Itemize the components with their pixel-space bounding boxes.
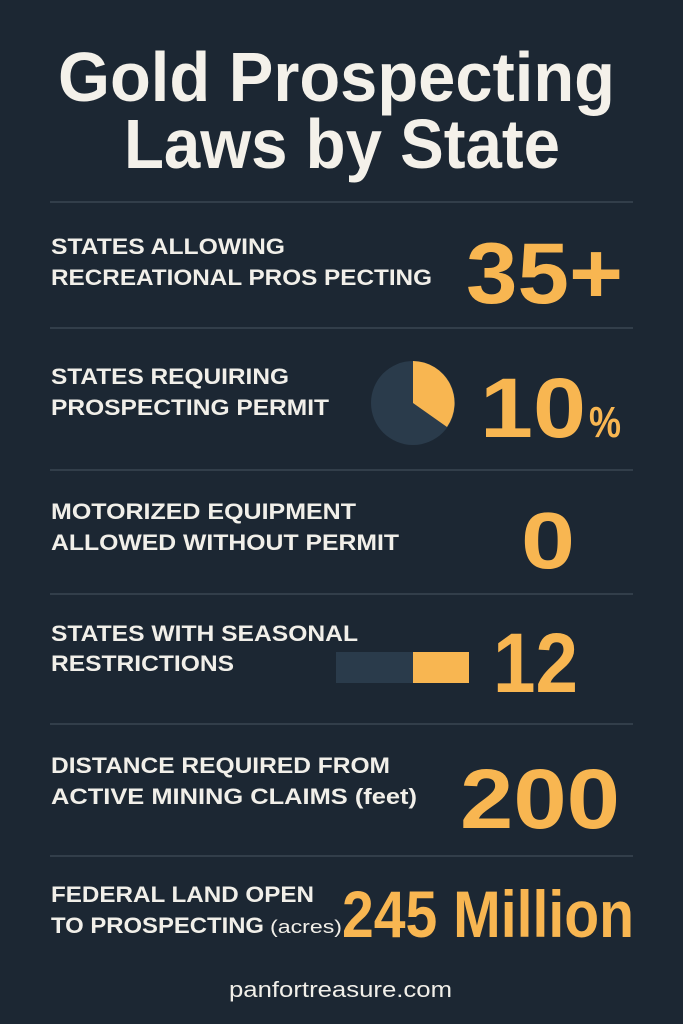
row 5: distance from claims: 200 — [460, 752, 620, 846]
footer: panfortreasure.com — [229, 977, 452, 1002]
title: Gold Prospecting — [58, 38, 615, 116]
row 4: seasonal restrictions: STATES WITH SEASONAL — [51, 621, 358, 646]
row 5: distance from claims: ACTIVE MINING CLAIMS (feet) — [51, 784, 417, 809]
row 2: prospecting permit — [51, 361, 621, 455]
title — [58, 38, 615, 183]
row 6: federal land: FEDERAL LAND OPEN — [51, 882, 314, 907]
row 1: recreational prospecting: RECREATIONAL PROS PECTING — [51, 265, 432, 290]
row 2: prospecting permit: STATES REQUIRING — [51, 364, 289, 389]
title: Laws by State — [124, 105, 560, 183]
row 3: motorized equipment — [51, 496, 575, 585]
row 5: distance from claims — [51, 752, 620, 846]
row 4: seasonal restrictions: RESTRICTIONS — [51, 651, 234, 676]
row 6: federal land — [51, 877, 634, 951]
row 6: federal land: 245 Million — [342, 877, 634, 951]
pie chart — [371, 361, 455, 445]
row 3: motorized equipment: MOTORIZED EQUIPMENT — [51, 499, 357, 524]
row 6: federal land: TO PROSPECTING — [51, 913, 264, 938]
row 1: recreational prospecting: 35+ — [466, 226, 623, 322]
row 4: seasonal restrictions — [51, 616, 578, 710]
row 2: prospecting permit: PROSPECTING PERMIT — [51, 395, 330, 420]
row 6: federal land: (acres) — [270, 917, 342, 937]
row 5: distance from claims: DISTANCE REQUIRED FROM — [51, 753, 390, 778]
row 2: prospecting permit: 10 — [480, 361, 586, 455]
row 3: motorized equipment: 0 — [521, 496, 575, 585]
row 4: seasonal restrictions: 12 — [493, 616, 578, 710]
row 2: prospecting permit: % — [589, 398, 621, 447]
row 3: motorized equipment: ALLOWED WITHOUT PERMIT — [51, 530, 400, 555]
bar chart — [336, 652, 469, 683]
row 1: recreational prospecting — [51, 226, 623, 322]
row 1: recreational prospecting: STATES ALLOWING — [51, 234, 285, 259]
